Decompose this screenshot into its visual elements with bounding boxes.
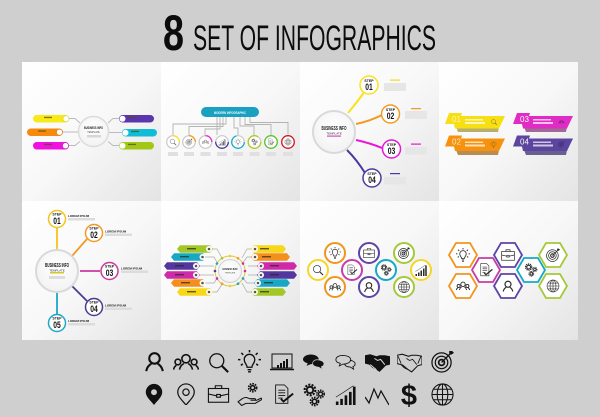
panel 4: ribbons: 03 [520, 115, 529, 124]
panel 5: five steps: STEP [89, 226, 99, 230]
panel 2: modern infographic [167, 107, 294, 156]
panel 5: five steps: 02 [90, 230, 98, 240]
icon row 1 [146, 350, 454, 372]
panel 5: five steps: STEP [105, 264, 115, 268]
panel 3: four steps: BUSINESS INFO [322, 126, 347, 132]
panel 6: twelve arrows around a hub: BUSINESS INFO [222, 267, 238, 271]
panel 5: five steps: STEP [89, 300, 99, 304]
panel 5: five steps: STEP [52, 212, 62, 216]
icon row 2: $ [401, 380, 417, 412]
panel 2: modern infographic: MODERN INFOGRAPHIC [214, 110, 246, 115]
icon row 2 [146, 380, 453, 412]
panel 3: four steps: TEMPLATE [326, 132, 342, 136]
panel 4: ribbons: 02 [452, 138, 461, 146]
panel 5: five steps: STEP [52, 316, 62, 320]
panel 5: five steps: TEMPLATE [49, 268, 65, 272]
panel 3: four steps: STEP [386, 108, 396, 112]
panel backgrounds [22, 62, 578, 340]
panel 4: ribbons: 01 [452, 115, 461, 124]
panel 3: four steps: STEP [367, 172, 377, 176]
panel 6: twelve arrows around a hub: TEMPLATE [225, 272, 236, 274]
title: SET OF INFOGRAPHICS [193, 19, 436, 58]
panel 5: five steps [36, 210, 148, 332]
panel 6: twelve arrows around a hub [164, 245, 297, 296]
panel 1: pill infographic: TEMPLATE [87, 131, 100, 134]
panel 5: five steps: 04 [90, 304, 98, 314]
panel 5: five steps: 01 [53, 216, 61, 226]
panel 7: circle icons [308, 243, 431, 297]
panel 5: five steps: LOREM IPSUM [105, 304, 127, 308]
panel 3: four steps: STEP [387, 143, 397, 147]
panel 3: four steps: 04 [368, 175, 376, 185]
panel 3: four steps: 03 [388, 146, 395, 156]
panel 5: five steps: LOREM IPSUM [105, 230, 127, 234]
title [163, 5, 436, 61]
panel 4: ribbons [445, 113, 573, 155]
panel 3: four steps [313, 76, 427, 187]
panel 3: four steps: 01 [365, 82, 373, 92]
panel 1: pill infographic [27, 115, 157, 150]
panel 5: five steps: LOREM IPSUM [68, 319, 90, 323]
panel 5: five steps: BUSINESS INFO [45, 263, 69, 269]
panel 3: four steps: 02 [387, 111, 394, 121]
panel 5: five steps: 05 [53, 320, 61, 330]
title: 8 [163, 5, 184, 61]
panel 8: hexagon icons [449, 243, 567, 298]
panel 5: five steps: LOREM IPSUM [121, 266, 143, 270]
panel 3: four steps: STEP [364, 79, 374, 83]
panel 1: pill infographic: BUSINESS INFO [84, 126, 103, 130]
panel 5: five steps: LOREM IPSUM [68, 214, 90, 218]
panel 5: five steps: 03 [106, 268, 113, 278]
panel 4: ribbons: 04 [520, 138, 529, 146]
